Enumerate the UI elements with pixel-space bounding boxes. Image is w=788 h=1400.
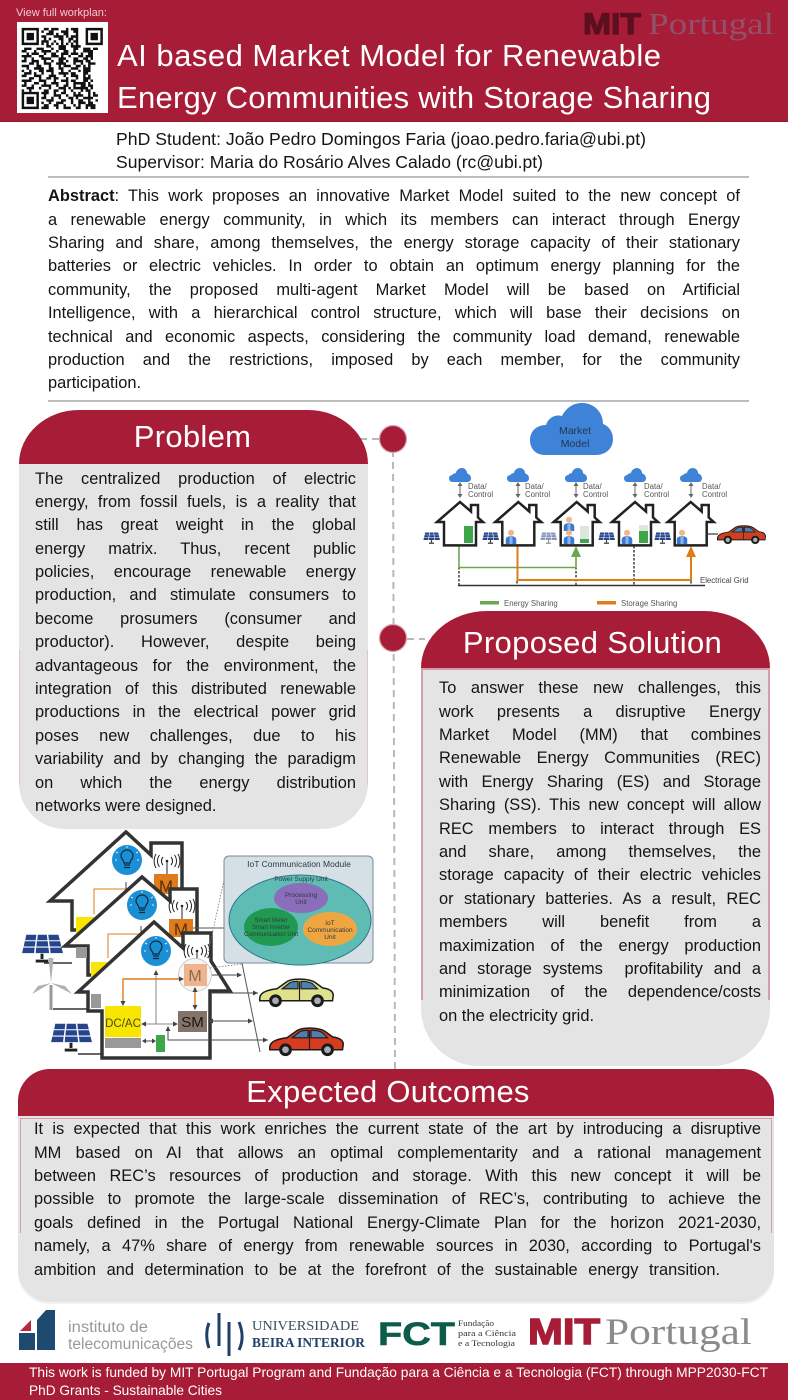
abstract text <box>48 186 740 392</box>
problem text: variability and by changing the paradigm <box>35 749 356 768</box>
author names: PhD Student: João Pedro Domingos Faria (joao.pedro.faria@ubi.pt) <box>116 129 646 149</box>
logo: universidade beira interior: UNIVERSIDADE <box>252 1319 359 1334</box>
outcomes text: possible to promote the large-scale dissemination of REC’s, contributing to achieve the <box>34 1189 761 1208</box>
outcomes text: ambition and determination to be at the forefront of the sustainable energy transition. <box>34 1260 720 1279</box>
solar panels <box>423 533 671 543</box>
icon: antenna <box>184 944 210 964</box>
solution text: work presents a disruptive Energy <box>439 702 761 721</box>
outcomes text: between REC’s resources of production and storage. With this new concept it will be <box>34 1166 761 1185</box>
problem text: advantageous for the environment, the <box>35 656 356 675</box>
solution text: on the electricity grid. <box>439 1006 594 1025</box>
abstract text: a renewable energy community, in which its members can interact through Energy <box>48 210 740 229</box>
author names: Supervisor: Maria do Rosário Alves Calado (rc@ubi.pt) <box>116 152 543 172</box>
solution text: with Energy Sharing (ES) and Storage <box>439 772 761 791</box>
QR code caption: View full workplan: <box>16 7 107 19</box>
battery <box>156 1035 165 1052</box>
title <box>117 38 711 115</box>
solution text: or stationary batteries. As a result, REC <box>439 889 761 908</box>
logo: FCT: para a Ciência <box>458 1329 517 1338</box>
DC/AC inverter <box>105 1006 141 1048</box>
IoT dotted callout lines <box>207 880 242 968</box>
abstract text: technical and economic aspects, considering the community load demand, renewable <box>48 327 740 346</box>
data and control arrows <box>458 482 727 499</box>
solution text: minimization of the dependence/costs <box>439 982 761 1001</box>
front house <box>78 922 230 1058</box>
author names <box>116 129 646 172</box>
legend: Storage Sharing <box>621 599 677 608</box>
solution text: maximization of the energy production <box>439 936 761 955</box>
footer funding note <box>0 1363 788 1400</box>
grid and sharing lines <box>458 546 705 586</box>
IoT communication module: Smart Meter <box>254 918 288 924</box>
logo: FCT: Fundação <box>458 1319 494 1328</box>
data and control arrows: Control <box>702 490 727 499</box>
outcomes text: goals defined in the Portugal National Energy-Climate Plan for the horizon 2021-2030, <box>34 1213 761 1232</box>
problem text: productor). However, despite being <box>35 632 356 651</box>
diagram: smart houses with IoT communication module <box>22 830 374 1060</box>
solution text: To answer these new challenges, this <box>439 678 761 697</box>
meter M: M <box>188 968 202 985</box>
IoT communication module: Processing <box>285 892 317 899</box>
footer funding note: PhD Grants - Sustainable Cities <box>29 1383 222 1398</box>
problem text: poses new challenges, due to his <box>35 726 356 745</box>
logo: MIT Portugal: Portugal <box>605 1312 752 1353</box>
logo: universidade beira interior: BEIRA INTERIOR <box>252 1336 366 1351</box>
outcomes text: It is expected that this work enriches the current state of the art by introducing a disruptive <box>34 1119 761 1138</box>
smart meter SM <box>178 1011 207 1032</box>
timeline connector <box>360 424 425 1069</box>
problem text: The centralized production of electric <box>35 468 356 488</box>
IoT communication module: Smart Inverter <box>252 925 290 931</box>
problem text: networks were designed. <box>35 796 216 815</box>
IoT communication module <box>224 856 373 965</box>
data and control arrows: Control <box>525 490 550 499</box>
solution text: members will benefit from a <box>439 912 761 931</box>
outcomes text <box>34 1119 761 1279</box>
abstract text: Intelligence, with a hierarchical control structure, which will base their decisions on <box>48 303 740 322</box>
data and control arrows: Control <box>644 490 669 499</box>
heading: proposed solution: Proposed Solution <box>463 625 722 660</box>
IoT communication module: IoT Communication Module <box>247 859 351 869</box>
logo: universidade beira interior <box>205 1313 366 1356</box>
solution text: and share, among themselves, the <box>439 842 761 861</box>
data and control arrows: Data/ <box>644 482 663 491</box>
IoT communication module: Unit <box>324 934 336 941</box>
back house <box>50 832 182 934</box>
middle house <box>65 877 197 978</box>
header band <box>0 0 788 122</box>
data and control arrows: Data/ <box>525 482 544 491</box>
community members <box>506 517 687 544</box>
QR code <box>17 22 108 113</box>
icon: bulb <box>141 936 171 966</box>
IoT communication module: IoT <box>325 920 335 927</box>
small clouds <box>449 468 702 482</box>
problem text <box>35 468 356 815</box>
IoT communication module: Unit <box>295 899 307 906</box>
legend <box>480 599 677 608</box>
diagram: market model with energy and storage sharing <box>423 403 766 608</box>
logo: instituto de telecomunicações <box>19 1310 193 1353</box>
middle house: M <box>174 920 188 939</box>
solution text: Renewable Energy Communities (REC) <box>439 748 761 767</box>
data and control arrows: Control <box>468 490 493 499</box>
icon: market model cloud: Market <box>559 425 591 437</box>
problem text: integration of this distributed renewable <box>35 679 356 698</box>
icon: market model cloud: Model <box>561 438 589 450</box>
icon: yellow car <box>260 979 333 1007</box>
problem text: become prosumers (consumer and <box>35 609 356 628</box>
data and control arrows: Data/ <box>583 482 602 491</box>
panel: expected outcomes <box>18 1069 774 1304</box>
back house: M <box>159 877 173 896</box>
abstract text: production and the restrictions, imposed by each member, for the community <box>48 350 740 369</box>
outcomes text: namely, a 47% share of energy from renewable sources in 2030, according to Portugal's <box>34 1236 761 1255</box>
IoT communication module: Communication <box>307 927 353 934</box>
solution text: Sharing (SS). This new concept will allow <box>439 795 761 814</box>
data and control arrows: Data/ <box>468 482 487 491</box>
MIT Portugal logo in header <box>583 6 774 41</box>
meter M <box>178 958 212 992</box>
abstract text: batteries or electric vehicles. In order to obtain an optimum energy planning for the <box>48 256 740 275</box>
solution text: Market Model (MM) that combines <box>439 725 761 744</box>
IoT communication module: Power Supply Unit <box>274 876 328 883</box>
electrical grid label: Electrical Grid <box>700 576 749 585</box>
icon: red car <box>270 1028 343 1056</box>
IoT links <box>193 928 260 1052</box>
batteries <box>464 525 648 543</box>
houses <box>437 502 714 545</box>
problem text: still has great weight in the global <box>35 515 356 534</box>
energy sources <box>22 935 102 1054</box>
abstract text: participation. <box>48 373 141 392</box>
logo: FCT: FCT <box>378 1316 456 1352</box>
title: AI based Market Model for Renewable <box>117 38 661 73</box>
problem text: energy, from fossil fuels, is a reality that <box>35 492 356 511</box>
logo: MIT Portugal <box>528 1311 752 1353</box>
DC/AC inverter: DC/AC <box>105 1018 141 1030</box>
panel: problem <box>19 410 368 829</box>
problem text: energy matrix. Thus, recent public <box>35 539 356 558</box>
solution text: storage capacity of their electric vehicles <box>439 865 761 884</box>
house wiring arrows <box>120 970 268 1044</box>
title: Energy Communities with Storage Sharing <box>117 80 711 115</box>
MIT Portugal logo in header: Portugal <box>648 6 774 41</box>
panel: proposed solution <box>421 611 770 1066</box>
smart meter SM: SM <box>181 1014 204 1031</box>
solution text <box>439 678 761 1025</box>
problem text: policies, encourage renewable energy <box>35 562 356 581</box>
MIT Portugal logo in header: MIT <box>583 8 641 41</box>
heading: problem: Problem <box>134 419 251 454</box>
data and control arrows: Data/ <box>702 482 721 491</box>
problem text: on which the energy distribution <box>35 773 356 792</box>
IoT communication module: Communication Unit <box>244 932 298 938</box>
logo: instituto de telecomunicações: instituto de <box>68 1319 148 1336</box>
legend: Energy Sharing <box>504 599 558 608</box>
logo: FCT: e a Tecnologia <box>458 1339 516 1348</box>
abstract text: Sharing and share, among themselves, the energy storage capacity of their stationary <box>48 233 740 252</box>
logo: instituto de telecomunicações: telecomunicações <box>68 1336 193 1353</box>
logo: FCT <box>378 1316 517 1352</box>
icon: market model cloud <box>530 403 613 455</box>
data and control arrows: Control <box>583 490 608 499</box>
heading: expected outcomes: Expected Outcomes <box>246 1074 530 1109</box>
footer funding note: This work is funded by MIT Portugal Program and Fundação para a Ciência e a Tecnologia (FCT) through MPP2030-FCT <box>29 1365 769 1380</box>
abstract text: Abstract: This work proposes an innovative Market Model suited to the new concept of <box>48 186 740 205</box>
abstract text: community, the proposed multi-agent Market Model will be based on Artificial <box>48 280 740 299</box>
outcomes text: MM based on AI that allows an optimal complementarity and a rational management <box>34 1143 761 1162</box>
icon: electric car <box>706 526 766 544</box>
logo: MIT Portugal: MIT <box>528 1311 600 1352</box>
solution text: REC members to interact through ES <box>439 819 761 838</box>
problem text: production, and stimulate consumers to <box>35 585 356 604</box>
problem text: productions in the electrical power grid <box>35 702 356 721</box>
solution text: and storage systems profitability and a <box>439 959 761 978</box>
